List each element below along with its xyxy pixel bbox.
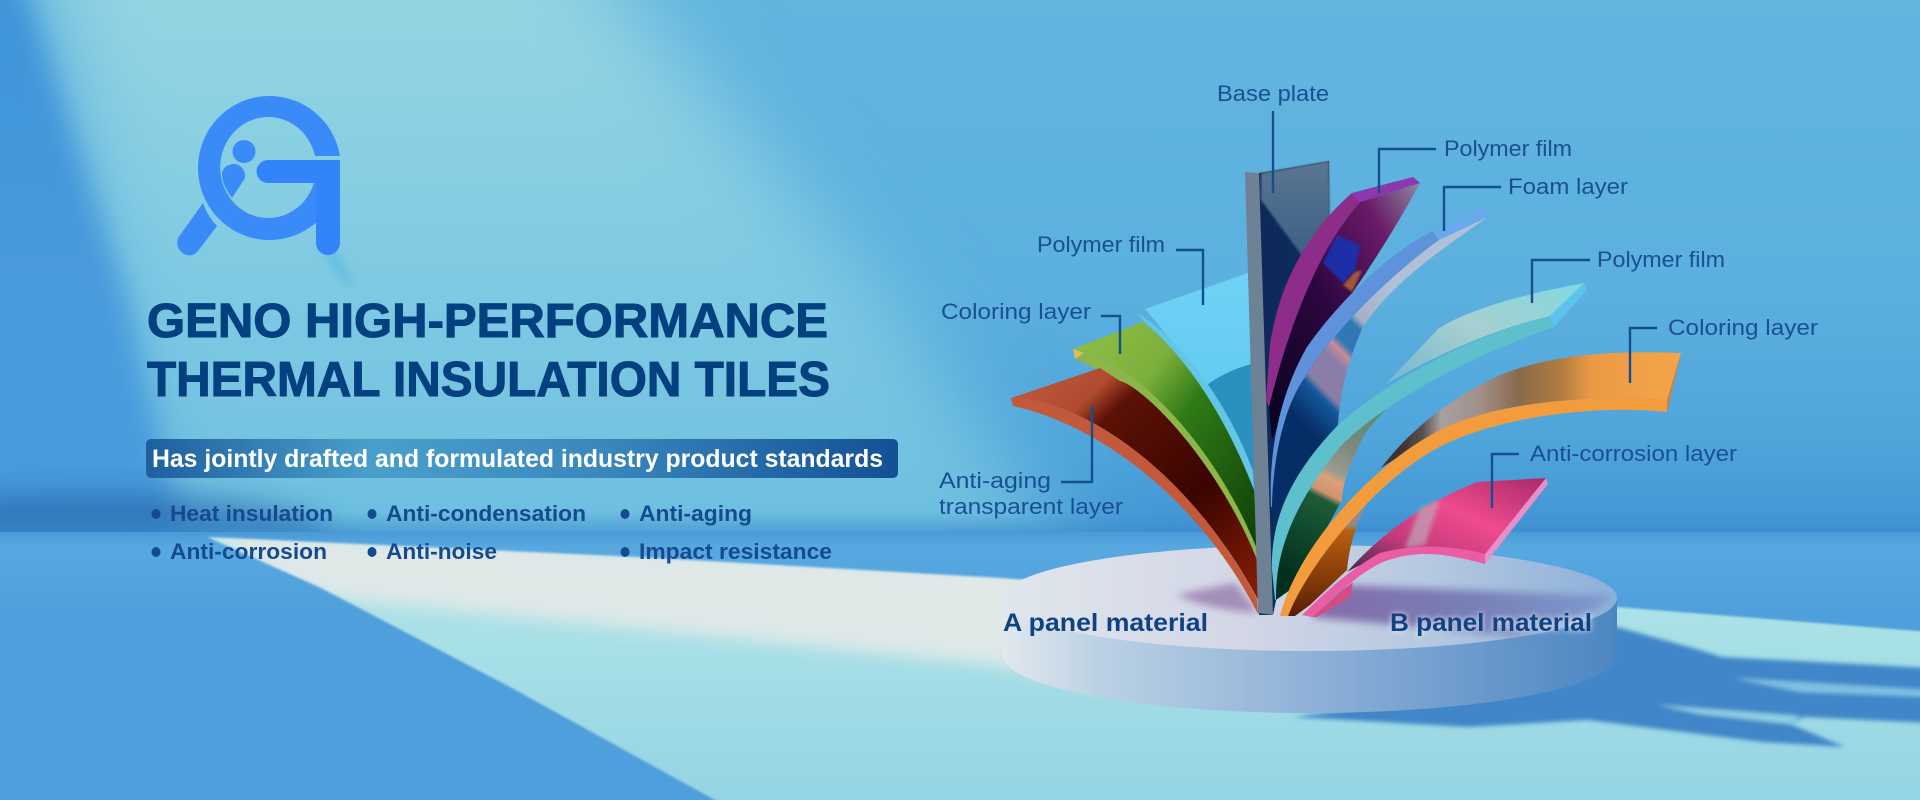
label: anti-aging transparent layer [939, 406, 1123, 519]
layer: polymer film purple [1266, 177, 1420, 440]
label: coloring layer right: Coloring layer [1668, 315, 1818, 340]
layer: coloring layer green [1073, 322, 1258, 562]
label: polymer film left [1037, 232, 1203, 305]
label: coloring layer right [1630, 315, 1818, 383]
label: polymer film top right [1379, 136, 1572, 193]
label: foam layer [1444, 174, 1628, 231]
label: coloring layer left: Coloring layer [941, 299, 1091, 324]
label: polymer film left: Polymer film [1037, 232, 1165, 257]
banner: standards: Has jointly drafted and formulated industry product standards [152, 445, 883, 473]
label: base plate: Base plate [1217, 81, 1329, 106]
feature list: Anti-noise [386, 539, 497, 564]
label: polymer film right [1532, 247, 1725, 303]
label: foam layer: Foam layer [1508, 174, 1628, 199]
label: polymer film right: Polymer film [1597, 247, 1725, 272]
layer: base plate back face [1259, 161, 1330, 615]
label: anti-corrosion layer [1492, 441, 1737, 508]
layer: polymer film sky blue [1137, 273, 1254, 490]
feature list: Heat insulation [170, 501, 333, 526]
feature list [152, 501, 832, 564]
feature list: Anti-corrosion [170, 539, 327, 564]
layer: polymer film teal [1272, 283, 1587, 600]
feature list: Impact resistance [639, 539, 832, 564]
platform [1003, 545, 1617, 713]
label: B panel material: B panel material [1390, 609, 1592, 637]
label: A panel material: A panel material [1003, 609, 1208, 637]
title: GENO HIGH-PERFORMANCE [147, 295, 828, 348]
label: base plate [1217, 81, 1329, 193]
feature list: Anti-aging [639, 501, 752, 526]
label: anti-corrosion layer: Anti-corrosion layer [1530, 441, 1737, 466]
label: coloring layer left [941, 299, 1120, 354]
label: anti-aging transparent layer: Anti-aging [939, 468, 1051, 493]
labels and leader lines [939, 81, 1818, 519]
title: THERMAL INSULATION TILES [147, 353, 830, 407]
label: anti-aging transparent layer: transparent layer [939, 494, 1123, 519]
layer: base plate edge [1245, 172, 1273, 615]
layer: anti-aging transparent layer red [1011, 368, 1258, 614]
label: polymer film top right: Polymer film [1444, 136, 1572, 161]
layer: foam layer blue [1271, 209, 1488, 550]
feature list: Anti-condensation [386, 501, 586, 526]
logo: G magnifier [177, 96, 356, 285]
layer: coloring layer orange [1280, 352, 1681, 616]
title [147, 295, 830, 407]
label: B panel material: B panel material [1390, 609, 1592, 637]
fan of material layers [1011, 161, 1681, 617]
layer: anti-corrosion layer pink [1302, 478, 1548, 617]
